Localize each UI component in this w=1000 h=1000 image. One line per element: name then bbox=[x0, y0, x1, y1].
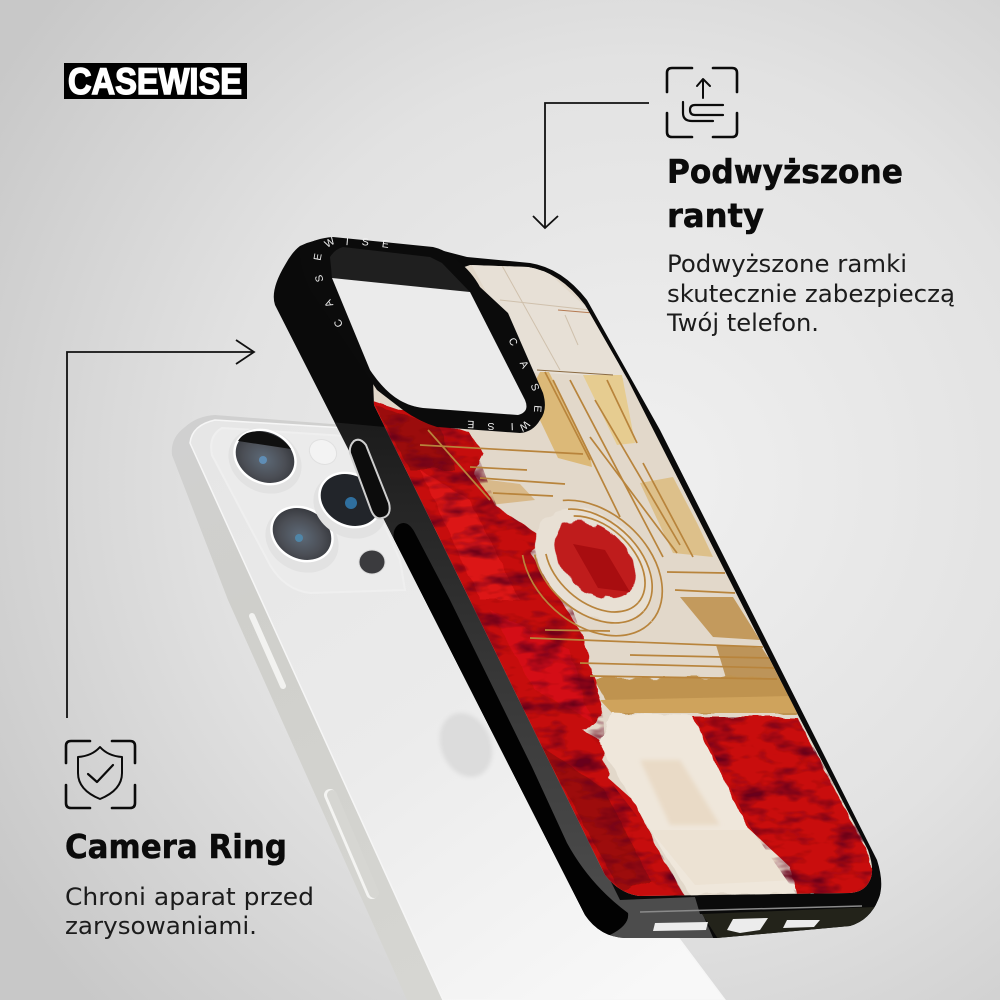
gold band bbox=[593, 677, 797, 713]
case button bbox=[350, 440, 390, 518]
bright red strokes bbox=[420, 470, 520, 600]
ring wordmark lower: CASEWISE bbox=[467, 336, 543, 433]
side button upper bbox=[252, 616, 283, 686]
icon: shield bbox=[66, 741, 135, 808]
dark upper-left corner bbox=[375, 405, 455, 470]
text: camera ring description: zarysowaniami. bbox=[65, 912, 257, 940]
concentric rings bbox=[522, 499, 664, 637]
white phone behind the case bbox=[172, 415, 725, 1000]
phone ports bbox=[653, 918, 820, 933]
text: raised edges description: skutecznie zabezpieczą bbox=[667, 280, 955, 308]
dark lower-left area bbox=[540, 745, 650, 890]
cream stripe bottom bbox=[600, 713, 797, 895]
lens: bottom bbox=[254, 495, 350, 585]
bronze panel bbox=[680, 597, 760, 640]
case with painted back bbox=[274, 239, 890, 960]
flash bbox=[305, 435, 341, 469]
gold grooves bbox=[420, 372, 777, 679]
bronze strips bbox=[716, 645, 782, 678]
camera ring bbox=[300, 235, 545, 433]
artwork base bbox=[360, 255, 890, 905]
phone side edge bbox=[172, 415, 725, 1000]
lens: top bbox=[217, 416, 313, 506]
gold patches bbox=[474, 372, 713, 557]
red field left bbox=[370, 400, 687, 900]
painted artwork bbox=[360, 255, 890, 905]
arrow: left callout bbox=[67, 340, 254, 718]
text: raised edges description bbox=[666, 250, 955, 337]
camera opening bbox=[332, 278, 526, 415]
right paint texture bbox=[695, 717, 875, 895]
text: raised edges description: Twój telefon. bbox=[666, 309, 819, 337]
sensor bbox=[359, 550, 385, 574]
heading: raised edges: ranty bbox=[667, 196, 764, 235]
icon: raised edges bbox=[667, 68, 737, 137]
heading: raised edges bbox=[667, 152, 903, 235]
upper pale panel bbox=[470, 262, 625, 378]
central red disc bbox=[554, 519, 636, 599]
apple logo bbox=[430, 705, 502, 785]
arrow: top callout bbox=[533, 103, 649, 228]
ring wordmark upper: CASEWISE bbox=[312, 235, 390, 329]
text: raised edges description: Podwyższone ramki bbox=[667, 250, 907, 278]
central disc rings backing bbox=[534, 508, 651, 624]
phone back bbox=[190, 420, 725, 1000]
logo: CASEWISE bbox=[68, 61, 242, 102]
text: camera ring description bbox=[65, 883, 314, 940]
lens: right bbox=[302, 461, 398, 551]
tile seams bbox=[500, 262, 613, 375]
heading: camera ring: Camera Ring bbox=[65, 827, 287, 866]
ring frame bbox=[300, 237, 545, 433]
red field right bbox=[693, 717, 875, 895]
inner wall bbox=[330, 247, 470, 292]
left paint texture bbox=[370, 400, 687, 900]
text: camera ring description: Chroni aparat przed bbox=[65, 883, 314, 911]
heading: raised edges: Podwyższone bbox=[667, 152, 903, 191]
side button lower bbox=[330, 795, 374, 893]
camera plateau bbox=[211, 428, 405, 593]
case body bbox=[274, 239, 881, 938]
translucent rim over phone bbox=[330, 422, 885, 960]
